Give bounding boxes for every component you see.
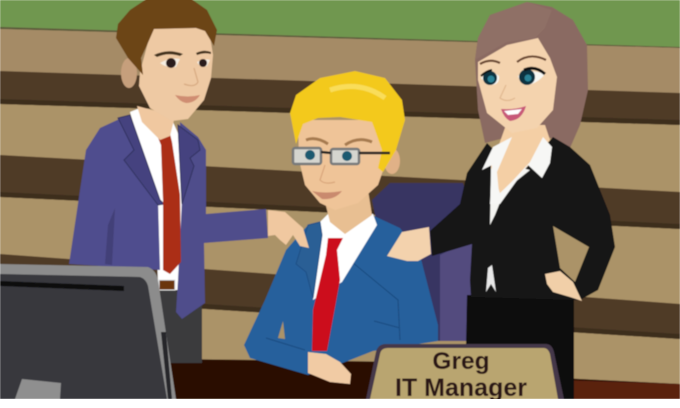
left man hand on shoulder xyxy=(268,210,309,248)
face xyxy=(478,38,557,133)
eyes xyxy=(481,72,499,85)
smile xyxy=(501,106,526,121)
shirt xyxy=(490,165,530,225)
blue jacket xyxy=(244,215,438,375)
lapels xyxy=(296,222,322,298)
mouth xyxy=(175,95,200,103)
woman xyxy=(387,2,615,399)
ear xyxy=(384,148,400,174)
nose xyxy=(184,68,198,86)
neck xyxy=(491,125,550,193)
tie xyxy=(157,134,181,274)
left man xyxy=(69,0,268,363)
nameplate xyxy=(366,344,564,402)
right collar xyxy=(495,137,552,204)
glasses xyxy=(293,148,390,164)
hand on shoulder xyxy=(387,227,431,261)
chair xyxy=(372,183,478,341)
left hand xyxy=(308,352,351,384)
neck xyxy=(137,106,175,140)
face xyxy=(298,120,385,210)
nameplate text: name: Greg xyxy=(432,348,490,375)
center man xyxy=(244,71,438,384)
shirt xyxy=(313,210,377,300)
ear xyxy=(121,58,137,88)
desk xyxy=(170,359,680,399)
belt xyxy=(159,280,175,290)
nameplate text: title: IT Manager xyxy=(395,374,527,402)
shirt xyxy=(130,108,182,290)
hair xyxy=(116,0,217,75)
left collar xyxy=(482,137,512,204)
brows xyxy=(154,51,183,57)
arm gap xyxy=(278,321,285,339)
neck xyxy=(325,193,372,234)
face xyxy=(139,24,213,121)
brows xyxy=(480,61,500,64)
sleeve lines xyxy=(266,262,400,350)
smile xyxy=(312,191,342,199)
fringe xyxy=(475,2,552,60)
trousers xyxy=(160,285,202,363)
shirt tail xyxy=(486,265,496,292)
brows xyxy=(306,139,328,144)
waist gap xyxy=(553,226,589,282)
jacket xyxy=(69,115,160,270)
jacket xyxy=(430,137,615,300)
hair back xyxy=(475,2,588,148)
hand on hip xyxy=(545,271,582,301)
eyes xyxy=(160,58,180,67)
tie xyxy=(312,238,343,351)
trousers xyxy=(465,295,574,399)
hair xyxy=(290,71,405,172)
computer monitor xyxy=(0,264,176,399)
